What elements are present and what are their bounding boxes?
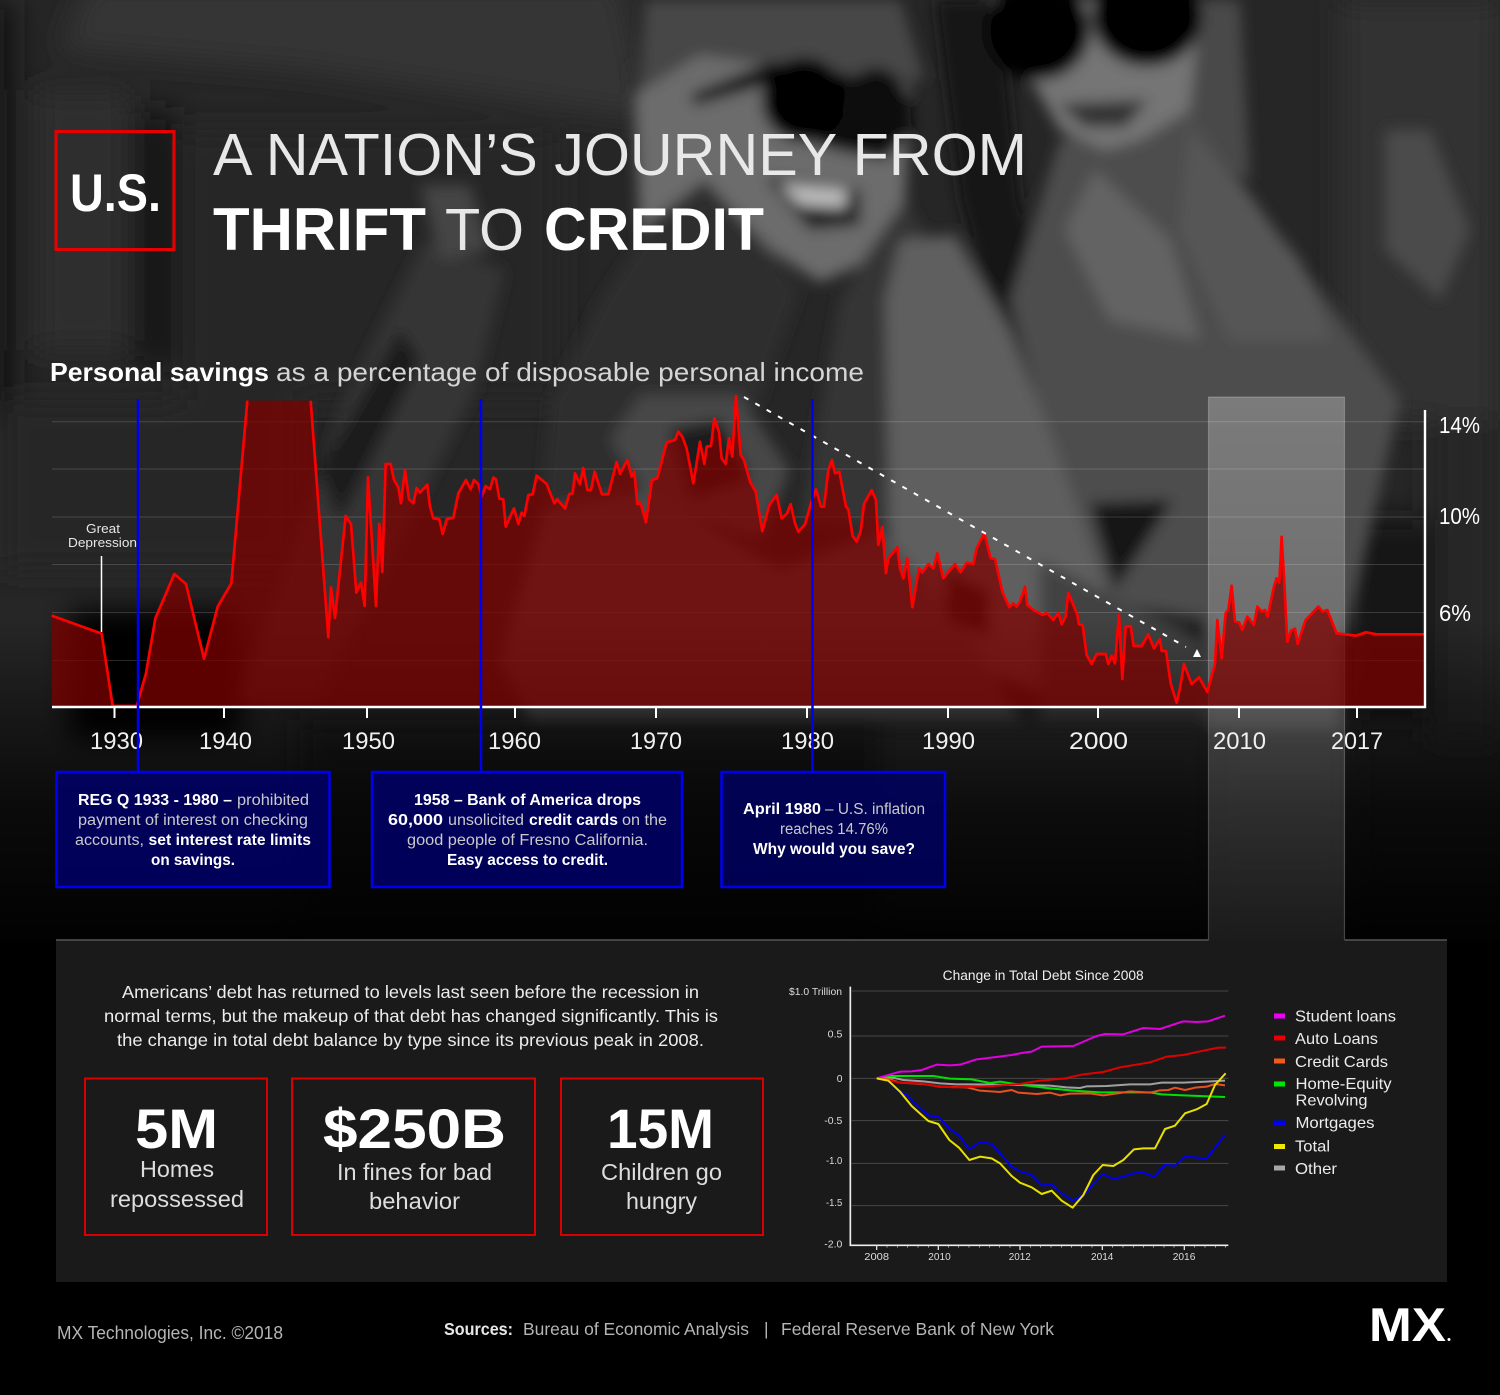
- stat card: 15M: hungry: [626, 1188, 698, 1214]
- face 2: [990, 0, 1200, 150]
- title: TO: [445, 197, 524, 263]
- callout: 1958 Bank of America: on the: [622, 812, 667, 829]
- stat card: $250B: [292, 1078, 535, 1235]
- annotation: Great Depression: Great: [86, 521, 120, 536]
- bag left: [240, 240, 505, 700]
- footer sources: [444, 1319, 1054, 1339]
- legend: Other: [1295, 1161, 1338, 1178]
- savings rate area chart: [52, 396, 1425, 718]
- callout: REG Q: payment of interest on checking: [78, 812, 308, 829]
- stat card: $250B: $250B: [323, 1097, 506, 1160]
- stat card: 15M: [561, 1078, 763, 1235]
- stat card: $250B: behavior: [369, 1188, 460, 1214]
- stat card: 5M: repossessed: [110, 1186, 244, 1212]
- footer sources: |: [764, 1319, 769, 1339]
- sweater: [500, 490, 1020, 720]
- callout: REG Q: prohibited: [237, 792, 309, 809]
- debt line chart: -0.5: [824, 1115, 842, 1127]
- stat card: 5M: Homes: [140, 1156, 214, 1182]
- stat card: 15M: 15M: [607, 1097, 714, 1160]
- x axis year labels: 1990: [922, 728, 975, 755]
- intro paragraph: Americans’ debt has returned to levels last seen before the recession in: [122, 982, 699, 1002]
- x axis year labels: 1930: [90, 728, 143, 755]
- intro paragraph: [104, 982, 718, 1050]
- debt line chart: 2012: [1009, 1251, 1031, 1263]
- stat card: 15M: Children go: [601, 1159, 722, 1185]
- callout: April 1980: Why would you save?: [753, 841, 915, 858]
- floral top: [885, 235, 1110, 700]
- title: A NATION’S JOURNEY FROM: [213, 122, 1027, 188]
- debt line chart: 2016: [1173, 1251, 1196, 1263]
- x axis year labels: [90, 728, 1383, 755]
- scarf: [610, 395, 790, 540]
- callout: 1958 Bank of America: 60,000: [388, 812, 443, 829]
- callout: 1958 Bank of America: good people of Fresno California.: [407, 832, 648, 849]
- stat card: $250B: In fines for bad: [337, 1159, 492, 1185]
- debt line chart: 2010: [928, 1251, 951, 1263]
- chart heading: as a percentage of disposable personal income: [276, 357, 864, 387]
- x axis year labels: 1970: [630, 728, 682, 755]
- debt line chart: 0.5: [828, 1028, 843, 1040]
- debt line chart: -1.5: [826, 1197, 842, 1209]
- annotation: Great Depression: [68, 521, 137, 632]
- debt line chart: 2014: [1091, 1251, 1114, 1263]
- callout: REG Q: set interest rate limits: [148, 832, 311, 849]
- callout: REG Q: on savings.: [151, 852, 235, 869]
- annotation: Great Depression: Depression: [68, 535, 137, 550]
- stat card: 5M: [85, 1078, 267, 1235]
- bags at bottom: [880, 720, 1210, 950]
- shoulder arm right: [1385, 130, 1470, 300]
- x axis year labels: 1980: [781, 728, 834, 755]
- y axis labels: [1439, 412, 1480, 626]
- x axis year labels: 2000: [1069, 728, 1128, 755]
- title badge U.S.: [56, 132, 174, 250]
- x axis year labels: 2010: [1213, 728, 1266, 755]
- hair woman 1 left: [540, 60, 800, 520]
- legend: Total: [1295, 1139, 1330, 1156]
- debt line chart: $1.0 Trillion: [789, 986, 842, 998]
- legend: Auto Loans: [1295, 1031, 1378, 1048]
- x axis year labels: 1950: [342, 728, 395, 755]
- footer sources: Sources:: [444, 1319, 513, 1339]
- y axis labels: 10%: [1439, 503, 1480, 529]
- intro paragraph: the change in total debt balance by type since its previous peak in 2008.: [117, 1030, 704, 1050]
- callout: 1958 Bank of America: unsolicited: [448, 812, 524, 829]
- y axis labels: 6%: [1439, 600, 1471, 626]
- legend: Home-Equity: [1296, 1076, 1392, 1093]
- footer copyright: MX Technologies, Inc. ©2018: [57, 1323, 283, 1343]
- stat card: 5M: 5M: [135, 1097, 218, 1160]
- title: THRIFT: [213, 196, 426, 263]
- glasses 1: [690, 62, 912, 160]
- debt line chart: [789, 968, 1228, 1263]
- callout: 1958 Bank of America: 1958 – Bank of America drops: [414, 792, 641, 809]
- callout: April 1980: April 1980: [743, 801, 821, 818]
- legend: Credit Cards: [1295, 1054, 1388, 1071]
- blue timeline markers: [138, 399, 812, 772]
- callout: REG Q: REG Q 1933 - 1980 –: [78, 792, 232, 809]
- footer sources: Federal Reserve Bank of New York: [781, 1319, 1054, 1339]
- x axis year labels: 2017: [1331, 728, 1383, 755]
- callout: April 1980: [722, 772, 945, 887]
- callout: 1958 Bank of America: credit cards: [529, 812, 618, 829]
- title: [213, 122, 1027, 263]
- y axis labels: 14%: [1439, 412, 1480, 438]
- callout: REG Q: [56, 772, 330, 887]
- title badge U.S.: U.S.: [70, 164, 161, 223]
- debt line chart: 2008: [864, 1251, 889, 1263]
- callout: 1958 Bank of America: [372, 772, 682, 887]
- face 1: [635, 55, 910, 282]
- chart heading: Personal savings: [50, 357, 269, 387]
- callout: REG Q: accounts,: [75, 832, 144, 849]
- hair woman 2: [935, 0, 1080, 440]
- legend: Revolving: [1296, 1093, 1368, 1110]
- MX logo: MX: [1369, 1298, 1446, 1351]
- callout: April 1980: reaches 14.76%: [780, 821, 888, 838]
- chart heading: [50, 357, 864, 387]
- panel: debt: [56, 940, 1447, 1282]
- intro paragraph: normal terms, but the makeup of that debt has changed significantly. This is: [104, 1006, 718, 1026]
- legend: Student loans: [1295, 1009, 1396, 1026]
- x axis year labels: 1960: [488, 728, 541, 755]
- title: CREDIT: [544, 196, 764, 263]
- debt line chart: 0: [837, 1073, 843, 1085]
- highlighted recession band: [1208, 397, 1344, 941]
- hair woman 1 right: [800, 200, 1000, 530]
- debt line chart: Change in Total Debt Since 2008: [943, 968, 1144, 983]
- callout: April 1980: – U.S. inflation: [825, 801, 925, 818]
- callout: 1958 Bank of America: Easy access to credit.: [447, 852, 608, 869]
- neck and chest: [1010, 110, 1400, 640]
- debt line chart: -1.0: [826, 1155, 842, 1167]
- legend: [1274, 1009, 1396, 1178]
- footer sources: Bureau of Economic Analysis: [523, 1319, 749, 1339]
- debt line chart: -2.0: [824, 1238, 842, 1250]
- mouth: [765, 177, 860, 230]
- dashed decline trend arrow: [744, 397, 1201, 657]
- legend: Mortgages: [1296, 1115, 1374, 1132]
- x axis year labels: 1940: [199, 728, 252, 755]
